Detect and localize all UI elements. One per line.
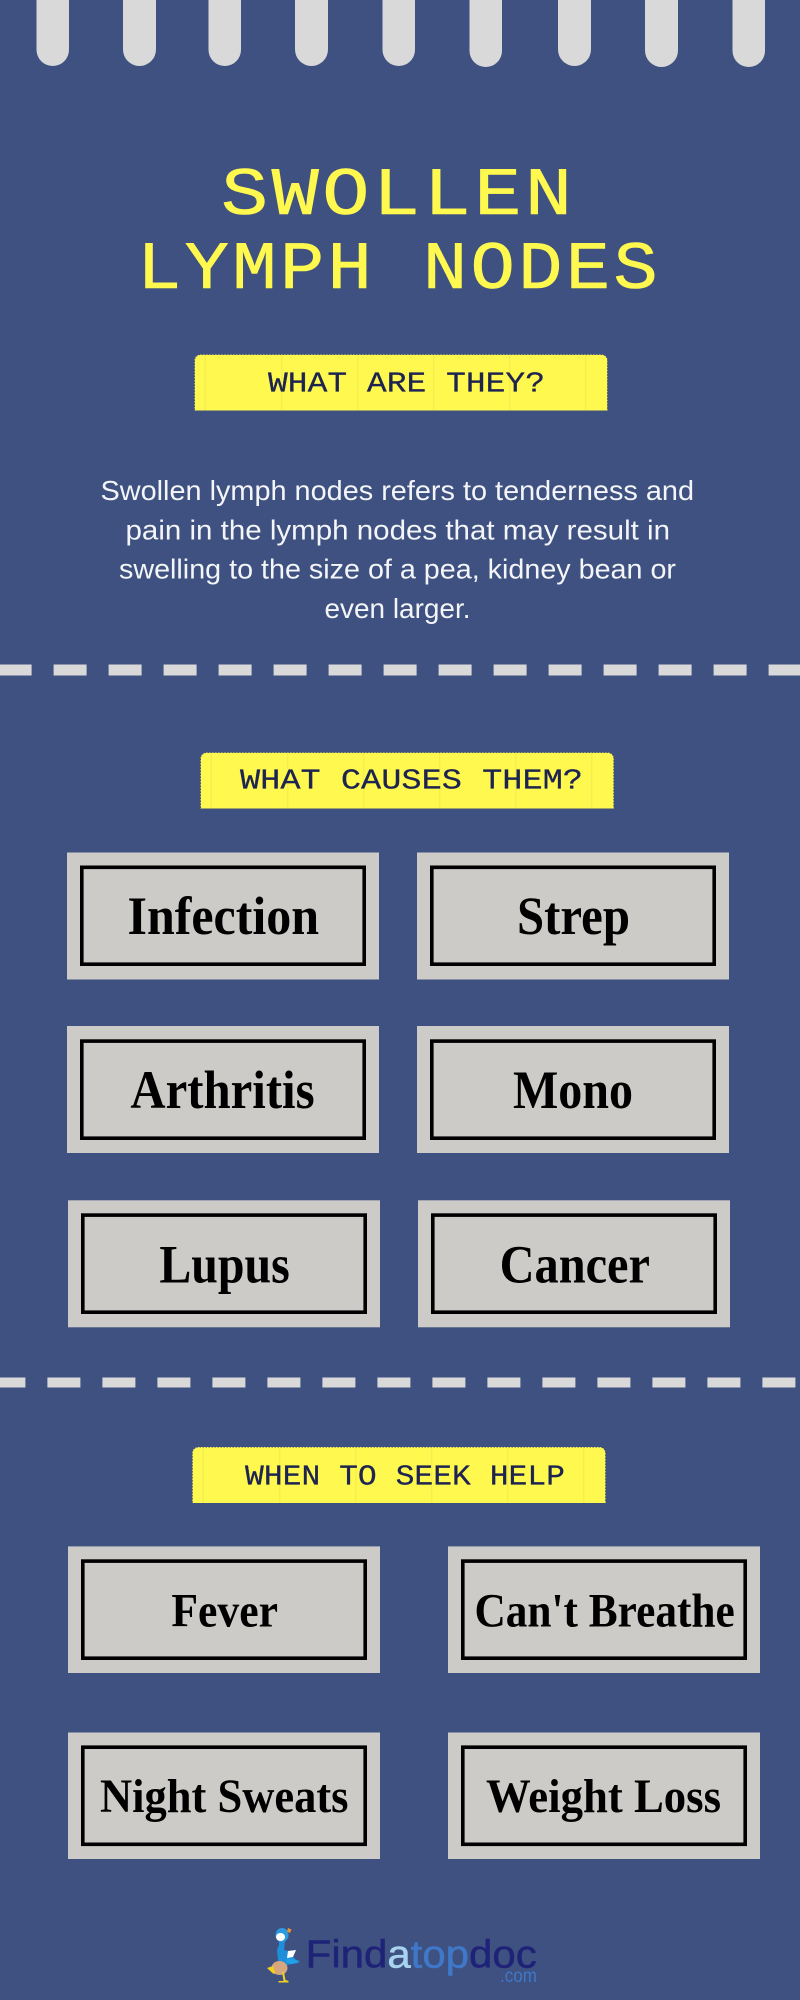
cause: arthritis	[67, 1026, 379, 1153]
cause: cancer	[418, 1200, 730, 1327]
symptom: can't breathe: Can't Breathe	[474, 1584, 735, 1638]
cause: lupus	[68, 1200, 380, 1327]
title: LYMPH NODES	[137, 232, 661, 309]
definition paragraph: Swollen lymph nodes refers to tenderness and	[100, 475, 694, 506]
heading: what causes them: WHAT CAUSES THEM?	[240, 764, 583, 798]
logo: Findatopdoc	[267, 1928, 537, 1987]
symptom: weight loss: Weight Loss	[486, 1770, 721, 1823]
heading: what are they: WHAT ARE THEY?	[268, 368, 545, 400]
definition paragraph: swelling to the size of a pea, kidney bean or	[119, 554, 676, 585]
heading: what causes them	[200, 752, 614, 808]
symptom: night sweats: Night Sweats	[100, 1770, 348, 1823]
cause: infection	[67, 852, 379, 980]
definition paragraph: pain in the lymph nodes that may result in	[126, 514, 670, 546]
icon: duck mascot	[267, 1928, 300, 1982]
notebook binding tabs	[36, 0, 765, 67]
cause: strep: Strep	[517, 886, 630, 946]
definition paragraph	[100, 475, 694, 624]
cause: mono: Mono	[513, 1060, 633, 1120]
definition paragraph: even larger.	[324, 593, 470, 624]
title: SWOLLEN	[221, 158, 576, 235]
title	[137, 158, 661, 309]
cause: strep	[417, 852, 729, 980]
heading: when to seek help: WHEN TO SEEK HELP	[245, 1460, 565, 1494]
symptom: can't breathe	[448, 1546, 760, 1673]
symptom: fever	[68, 1546, 380, 1673]
cause: arthritis: Arthritis	[130, 1060, 315, 1120]
domain suffix: .com	[500, 1966, 537, 1987]
symptom: fever: Fever	[171, 1584, 278, 1638]
heading: what are they	[194, 354, 608, 410]
cause: cancer: Cancer	[500, 1234, 650, 1294]
symptom: night sweats	[68, 1732, 380, 1859]
cause: infection: Infection	[128, 886, 319, 946]
wordmark: Findatopdoc	[306, 1934, 537, 1977]
symptom: weight loss	[448, 1732, 760, 1859]
heading: when to seek help	[192, 1447, 606, 1503]
cause: lupus: Lupus	[159, 1234, 290, 1294]
cause: mono	[417, 1026, 729, 1153]
